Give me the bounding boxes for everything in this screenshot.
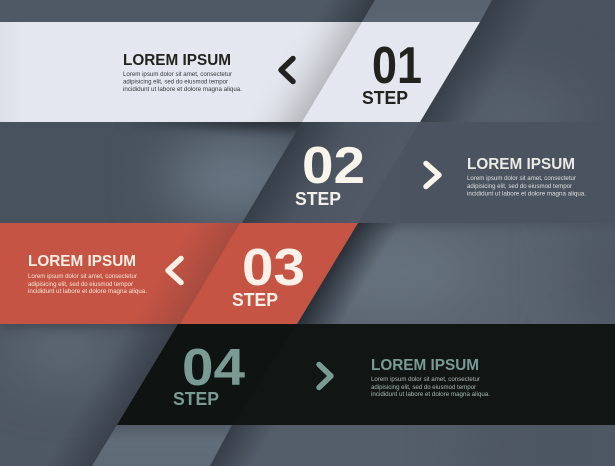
fold shadow 03	[145, 223, 240, 324]
title 01: LOREM IPSUM	[123, 52, 231, 69]
body text 04: incididunt ut labore et dolore magna aliqua.	[371, 392, 490, 398]
title 02: LOREM IPSUM	[467, 156, 575, 173]
body text 02: incididunt ut labore et dolore magna aliqua.	[467, 192, 586, 198]
body text 02: Lorem ipsum dolor sit amet, consectetur	[467, 176, 576, 182]
top diagonal strip	[362, 0, 492, 22]
panel: step 02	[242, 122, 615, 223]
body text 02	[467, 176, 586, 198]
body text 03	[28, 274, 147, 295]
body text 01	[123, 72, 242, 93]
body text 04	[371, 377, 490, 398]
step label 01: STEP	[362, 88, 408, 108]
step label 04: STEP	[173, 389, 219, 409]
body text 04: Lorem ipsum dolor sit amet, consectetur	[371, 377, 480, 383]
body text 03: adipisicing elit, sed do eiusmod tempor	[28, 282, 133, 288]
body text 01: Lorem ipsum dolor sit amet, consectetur	[123, 72, 232, 78]
fold shadow 01	[264, 22, 362, 122]
body text 03: Lorem ipsum dolor sit amet, consectetur	[28, 274, 137, 280]
panel: step 04	[117, 324, 615, 425]
bottom diagonal strip	[92, 425, 232, 466]
fold tone 04	[117, 324, 297, 425]
icon: chevron right	[319, 364, 331, 388]
icon: chevron left	[281, 58, 293, 82]
panel: bottom right background	[210, 425, 444, 466]
title 04: LOREM IPSUM	[371, 357, 479, 374]
step label 02: STEP	[295, 189, 341, 209]
icon: chevron right	[426, 164, 439, 186]
panel: band 2 background left	[131, 122, 302, 223]
number 04: 04	[182, 339, 245, 397]
title 03: LOREM IPSUM	[28, 253, 136, 270]
icon: chevron left	[168, 258, 181, 282]
body text 02: adipisicing elit, sed do eiusmod tempor	[467, 184, 572, 190]
panel: step 01	[0, 22, 480, 122]
step label 03: STEP	[232, 290, 278, 310]
number 02: 02	[302, 137, 365, 195]
panel: lower left background	[9, 324, 178, 466]
panel: step 03	[0, 223, 358, 324]
body text 01: incididunt ut labore et dolore magna aliqua.	[123, 87, 242, 93]
panel: band 3 right background	[297, 223, 584, 324]
body text 03: incididunt ut labore et dolore magna aliqua.	[28, 289, 147, 295]
body text 01: adipisicing elit, sed do eiusmod tempor	[123, 80, 228, 86]
body text 04: adipisicing elit, sed do eiusmod tempor	[371, 385, 476, 391]
number 03: 03	[242, 239, 305, 297]
background	[333, 0, 543, 122]
number 01: 01	[372, 37, 422, 95]
